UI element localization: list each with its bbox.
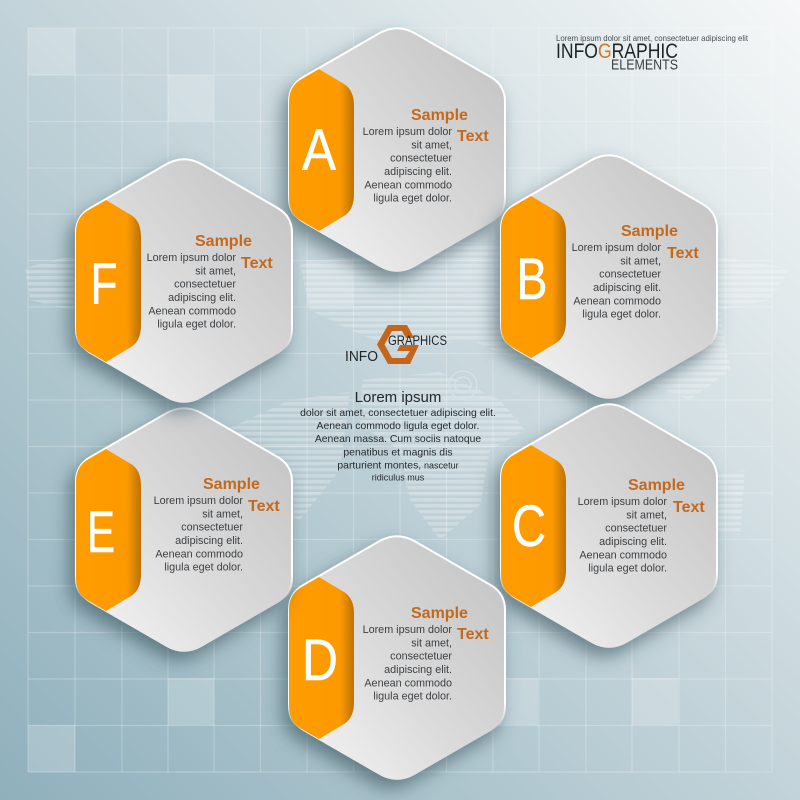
center text block	[300, 389, 496, 482]
text block C	[578, 477, 705, 575]
text block D	[363, 605, 489, 703]
center text block: Lorem ipsum	[355, 389, 441, 406]
text block D: adipiscing elit.	[384, 664, 452, 676]
text block A: Sample	[411, 107, 468, 124]
text block C: consectetuer	[605, 523, 667, 535]
text block E: Aenean commodo	[155, 548, 243, 560]
text block A: adipiscing elit.	[384, 166, 452, 178]
center text block: ridiculus mus	[372, 472, 425, 482]
orange tab E	[76, 449, 141, 611]
orange tab D	[289, 577, 354, 739]
header title: INFOGRAPHIC	[556, 40, 678, 63]
icon: G hexagon	[377, 325, 419, 364]
text block D: Lorem ipsum dolor	[363, 624, 452, 636]
text block A: consectetuer	[390, 153, 452, 165]
orange tab C	[501, 445, 566, 607]
text block D: Text	[457, 626, 489, 643]
orange tab A	[289, 69, 354, 231]
text block F: consectetuer	[174, 279, 236, 291]
text block B: Sample	[621, 223, 678, 240]
hexagon D	[289, 536, 505, 780]
letter E: E	[87, 500, 115, 565]
text block A	[363, 107, 489, 205]
orange tab F	[76, 200, 141, 362]
text block C: Aenean commodo	[579, 549, 667, 561]
text block E	[154, 476, 280, 574]
letter B: B	[516, 247, 548, 312]
letter A: A	[302, 118, 336, 183]
text block E: sit amet,	[202, 508, 243, 520]
hexagon A	[289, 28, 505, 272]
text block C: ligula eget dolor.	[588, 563, 667, 575]
hexagon E	[76, 408, 292, 652]
text block F: adipiscing elit.	[168, 292, 236, 304]
text block B: consectetuer	[599, 269, 661, 281]
text block E: consectetuer	[181, 522, 243, 534]
text block F	[147, 233, 273, 331]
center text block: Aenean commodo ligula eget dolor.	[317, 421, 479, 432]
text block A: Lorem ipsum dolor	[363, 126, 452, 138]
letter F: F	[90, 252, 118, 317]
letter D: D	[302, 628, 338, 693]
center logo	[345, 325, 447, 365]
text block A: ligula eget dolor.	[373, 193, 452, 205]
text block D: Aenean commodo	[364, 677, 452, 689]
text block E: Text	[248, 498, 280, 515]
text block B: Aenean commodo	[573, 295, 661, 307]
hexagon F	[76, 159, 292, 403]
letter C: C	[512, 494, 546, 559]
text block F: Aenean commodo	[148, 305, 236, 317]
text block F: Lorem ipsum dolor	[147, 252, 236, 264]
logo word GRAPHICS: GRAPHICS	[388, 333, 447, 348]
text block C: Lorem ipsum dolor	[578, 496, 667, 508]
text block C: Sample	[628, 477, 685, 494]
text block D: ligula eget dolor.	[373, 691, 452, 703]
header title: ELEMENTS	[611, 56, 678, 74]
text block E: Sample	[203, 476, 260, 493]
text block B: Lorem ipsum dolor	[572, 242, 661, 254]
text block E: ligula eget dolor.	[164, 562, 243, 574]
text block D: Sample	[411, 605, 468, 622]
text block E: adipiscing elit.	[175, 535, 243, 547]
text block C: Text	[673, 499, 705, 516]
header title: Lorem ipsum dolor sit amet, consectetuer adipiscing elit	[556, 33, 749, 43]
center text block: dolor sit amet, consectetuer adipiscing elit.	[300, 408, 496, 419]
center text block: Aenean massa. Cum sociis natoque	[315, 434, 481, 445]
text block D: consectetuer	[390, 651, 452, 663]
text block C: adipiscing elit.	[599, 536, 667, 548]
text block B: sit amet,	[620, 255, 661, 267]
text block C: sit amet,	[626, 509, 667, 521]
header title	[556, 33, 749, 74]
text block F: Sample	[195, 233, 252, 250]
text block F: Text	[241, 255, 273, 272]
center text block: parturient montes, nascetur	[337, 460, 459, 472]
text block D: sit amet,	[411, 637, 452, 649]
center text block: penatibus et magnis dis	[343, 448, 453, 458]
world map	[25, 240, 790, 540]
text block F: ligula eget dolor.	[157, 319, 236, 331]
logo word INFO: INFO	[345, 348, 378, 365]
hexagon C	[501, 404, 717, 648]
text block B: Text	[667, 245, 699, 262]
text block B	[572, 223, 699, 321]
text block B: adipiscing elit.	[593, 282, 661, 294]
hexagon B	[501, 155, 717, 399]
text block A: Aenean commodo	[364, 179, 452, 191]
text block B: ligula eget dolor.	[582, 309, 661, 321]
text block F: sit amet,	[195, 265, 236, 277]
orange tab B	[501, 196, 566, 358]
text block A: sit amet,	[411, 139, 452, 151]
text block A: Text	[457, 128, 489, 145]
text block E: Lorem ipsum dolor	[154, 495, 243, 507]
